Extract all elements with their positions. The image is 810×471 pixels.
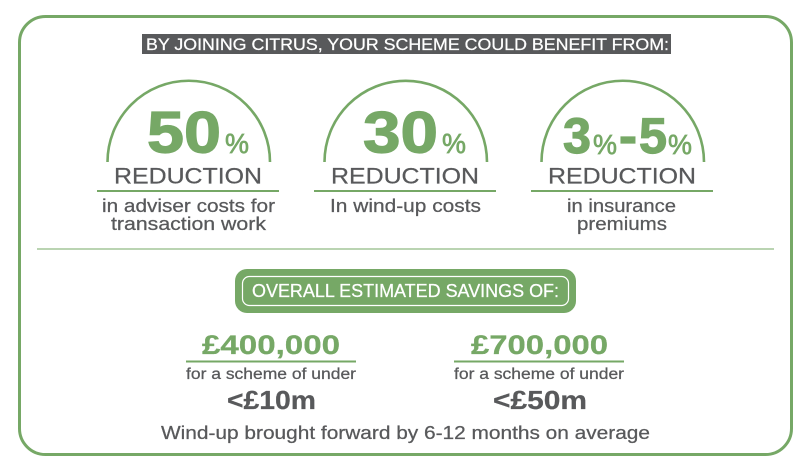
description 1 <box>102 196 275 234</box>
saving: £700,000: <£50m <box>493 385 587 415</box>
figure 30% <box>363 100 466 166</box>
figure 3%-5%: - <box>619 108 637 164</box>
figure 50% <box>147 100 249 166</box>
description 2: In wind-up costs <box>330 196 481 216</box>
figure 3%-5%: % <box>593 129 617 160</box>
figure 50%: 50 <box>147 100 221 166</box>
figure 3%-5%: 3 <box>563 108 591 164</box>
label 3: REDUCTION <box>548 164 696 188</box>
saving: £400,000: for a scheme of under <box>186 366 356 383</box>
saving: £700,000 <box>454 330 624 415</box>
savings banner <box>235 269 576 313</box>
saving: £400,000: <£10m <box>227 385 316 415</box>
figure 50%: % <box>225 128 249 159</box>
arch 2 <box>324 81 487 162</box>
description 3 <box>567 196 676 234</box>
description 3: in insurance <box>567 196 676 216</box>
saving: £700,000: for a scheme of under <box>454 366 624 383</box>
arch 1 <box>108 81 270 162</box>
figure 30%: 30 <box>363 100 438 166</box>
figure 3%-5% <box>563 108 692 164</box>
saving: £700,000: £700,000 <box>471 330 608 360</box>
label 2: REDUCTION <box>331 164 479 188</box>
footer note: Wind-up brought forward by 6-12 months on average <box>161 423 650 443</box>
arch 3 <box>542 81 704 162</box>
description 3: premiums <box>577 214 667 234</box>
saving: £400,000: £400,000 <box>202 330 340 360</box>
label 1: REDUCTION <box>114 164 262 188</box>
heading: BY JOINING CITRUS, YOUR SCHEME COULD BENEFIT FROM: <box>146 35 669 54</box>
panel: 3%-5% reduction <box>531 81 713 234</box>
panel: 50% reduction <box>97 81 279 234</box>
description 1: transaction work <box>111 214 267 234</box>
savings banner: OVERALL ESTIMATED SAVINGS OF: <box>252 281 559 301</box>
figure 3%-5%: % <box>668 129 692 160</box>
figure 3%-5%: 5 <box>639 108 667 164</box>
saving: £400,000 <box>186 330 356 415</box>
figure 30%: % <box>442 128 466 159</box>
description 1: in adviser costs for <box>102 196 275 216</box>
panel: 30% reduction <box>314 81 496 216</box>
